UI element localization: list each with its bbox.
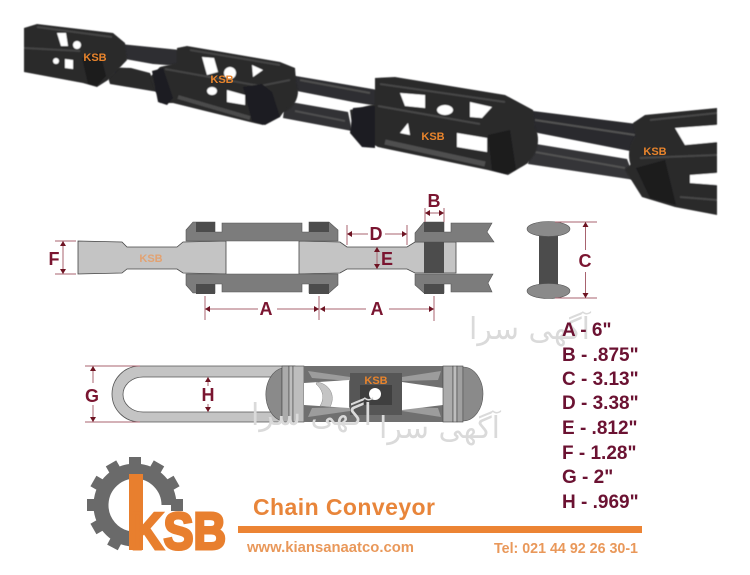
specification list: G - 2" (562, 467, 613, 488)
body highlights (308, 371, 441, 417)
middle link caps (196, 222, 329, 294)
pin hole (369, 388, 381, 400)
KSB label: KSB (139, 253, 163, 265)
specification list: B - .875" (562, 345, 639, 366)
photo watermark labels: KSB (643, 146, 667, 158)
dimension D (347, 224, 407, 245)
watermark: top: آگهی سرا (469, 311, 592, 347)
connecting pin (424, 222, 444, 294)
right dome (463, 367, 483, 421)
diagram: pin (527, 222, 570, 298)
website: www.kiansanaatco.com (246, 540, 414, 556)
connecting bars 3 (525, 110, 650, 180)
photo watermark labels: KSB (210, 74, 234, 86)
specification list (562, 320, 639, 513)
dimension C: C (578, 251, 592, 271)
left dome (266, 368, 282, 421)
telephone: Tel: 021 44 92 26 30-1 (494, 541, 638, 557)
left bands (282, 366, 304, 422)
photo watermark labels: KSB (83, 52, 107, 64)
dimension H (202, 377, 214, 412)
dimension E (374, 247, 393, 269)
dimension G: G (85, 386, 99, 406)
chain link 3 (350, 77, 538, 175)
dimension B: B (428, 191, 440, 211)
connecting bars 1 (105, 44, 180, 92)
chain link 4 (625, 108, 717, 215)
photo: conveyor chain (24, 24, 717, 215)
crescent (316, 382, 332, 407)
diagram: chain top view (78, 222, 494, 294)
orange rule (238, 526, 642, 533)
dimension E: E (381, 249, 393, 269)
dimension A left (205, 296, 319, 320)
U-shaped link (112, 366, 295, 422)
KSB label: KSB (364, 375, 388, 387)
gear (87, 457, 183, 550)
logo: KSB gear (87, 457, 226, 561)
right link fork (415, 222, 494, 293)
centre block (350, 373, 402, 415)
photo watermark labels: KSB (421, 131, 445, 143)
dimension A left: A (260, 299, 272, 319)
dimension B (425, 191, 444, 222)
specification list: A - 6" (562, 320, 611, 341)
photo watermark labels (83, 52, 667, 158)
side link body (304, 366, 443, 422)
body left opening (304, 380, 349, 408)
heading: Chain Conveyor (253, 494, 435, 520)
specification list: D - 3.38" (562, 393, 639, 414)
dimension F: F (48, 249, 60, 269)
watermark: middle: آگهی سرا (379, 410, 502, 446)
specification list: F - 1.28" (562, 443, 636, 464)
specification list: C - 3.13" (562, 369, 639, 390)
centre recess (360, 385, 392, 405)
chain link 1 (24, 24, 127, 87)
right rod (299, 241, 456, 274)
specification list: H - .969" (562, 492, 639, 513)
KSB letters: KSB (131, 503, 226, 561)
middle link plates (186, 222, 338, 293)
chain link 2 (150, 46, 298, 125)
watermark: left: آگهی سرا (251, 397, 374, 433)
left rod (78, 241, 226, 274)
right bands (443, 366, 463, 422)
dimension G (85, 366, 140, 422)
dimension F (48, 241, 76, 274)
body right opening (402, 382, 443, 410)
diagram: chain side view (112, 366, 483, 422)
dimension D: D (370, 224, 382, 244)
specification list: E - .812" (562, 418, 638, 439)
dimension A right: A (370, 299, 384, 319)
connecting bars 2 (283, 75, 378, 131)
dimension C (555, 222, 597, 298)
dimension H: H (202, 385, 214, 405)
K stem (129, 474, 143, 550)
dimension A right (320, 296, 434, 321)
